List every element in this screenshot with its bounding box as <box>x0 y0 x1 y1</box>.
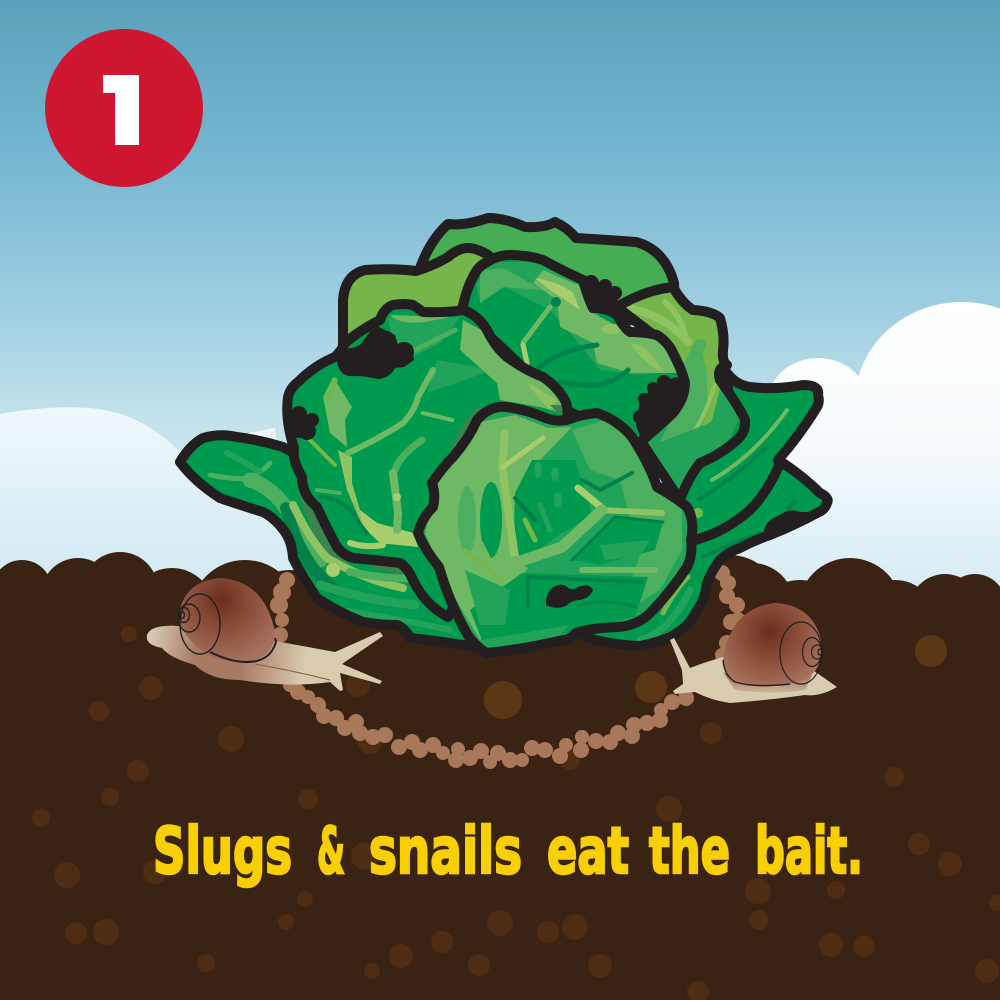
snail: left <box>147 578 383 691</box>
cloud: left <box>0 407 300 600</box>
leaf: front <box>418 407 692 655</box>
caption: bait. <box>755 815 863 889</box>
hole: front leaf <box>546 585 593 608</box>
caption: Slugs <box>153 815 292 889</box>
leaf: top back <box>416 218 676 320</box>
hole: center top <box>583 275 622 314</box>
caption <box>153 815 863 889</box>
snail shell <box>178 578 275 663</box>
snail: right <box>670 603 837 703</box>
shell spiral <box>780 622 822 684</box>
caption: the <box>649 815 730 889</box>
hole: lower right leaf <box>763 510 816 537</box>
leaf: far right <box>691 369 824 545</box>
leaf: right <box>617 285 745 500</box>
leaf: center <box>462 255 685 445</box>
hole: center right <box>633 375 686 445</box>
caption: & <box>317 815 345 889</box>
leaf: back left <box>343 248 492 350</box>
shell lip <box>210 638 276 662</box>
number badge: 1 <box>94 56 148 166</box>
sky background <box>0 0 1000 600</box>
snail foot shading <box>723 672 812 692</box>
cabbage <box>180 218 828 655</box>
snail body <box>670 638 837 703</box>
cloud: right <box>768 302 1000 590</box>
snail shell <box>723 603 822 687</box>
soil speckles <box>32 626 1000 1000</box>
soil ground <box>0 552 1000 1000</box>
hole: main leaf left <box>289 406 319 440</box>
leaf: bottom left <box>180 435 490 650</box>
snail body <box>147 626 383 691</box>
body stripe <box>255 664 330 680</box>
bite holes <box>289 275 816 608</box>
shell spiral <box>178 594 220 654</box>
shell lip <box>723 660 790 686</box>
caption: snails <box>369 815 522 889</box>
leaf: main left <box>287 304 570 617</box>
number badge <box>45 29 203 187</box>
caption: eat <box>547 815 629 889</box>
leaf: lower right <box>585 463 828 646</box>
hole: main leaf top <box>337 325 414 379</box>
bait trail: pellets <box>271 566 744 768</box>
